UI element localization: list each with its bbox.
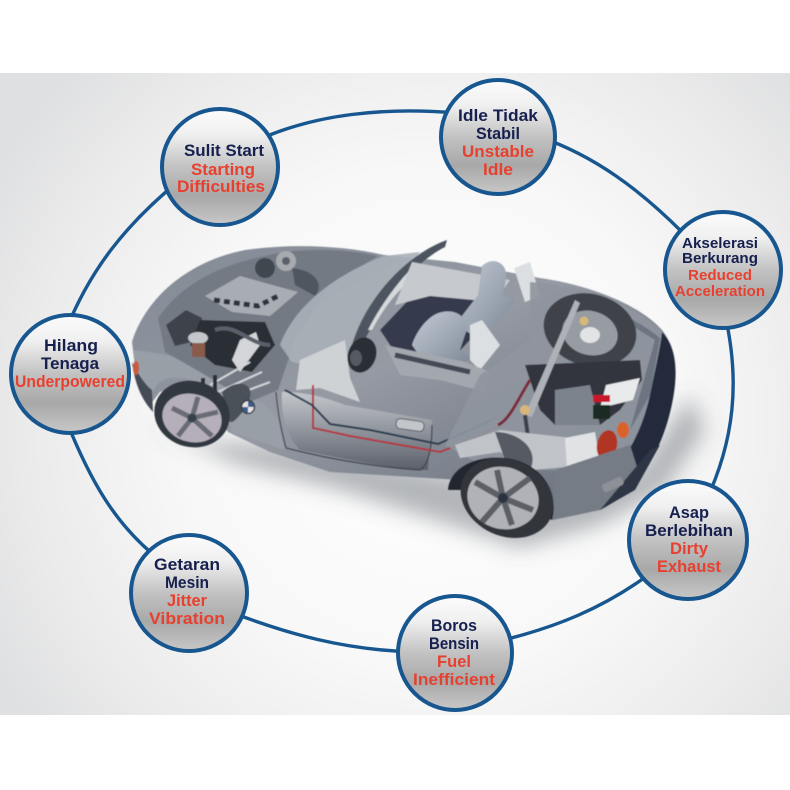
A pillar highlight (368, 268, 418, 330)
suspension struts (525, 300, 580, 417)
rear chassis (455, 430, 590, 470)
near seat (412, 311, 474, 364)
blue wire (285, 390, 495, 444)
engine block (166, 251, 319, 422)
steering wheel (343, 333, 381, 377)
badge: Idle Tidak Stabil: Idle Tidak (458, 106, 539, 125)
badge: Sulit Start: Starting (191, 160, 255, 179)
red wire (313, 385, 500, 452)
badge: Akselerasi Berkurang: Berkurang (682, 250, 758, 267)
rear wheel (447, 443, 567, 553)
red conduit (498, 380, 530, 425)
trunk lid highlight (590, 300, 660, 430)
far door panel (395, 262, 510, 305)
pipes and silver parts (188, 332, 208, 344)
rear deck transparent (445, 282, 668, 470)
spare tyre (535, 283, 645, 377)
windshield glass (280, 252, 420, 372)
windshield frame (352, 240, 447, 345)
badge: Sulit Start: Difficulties (177, 177, 265, 196)
roll hoops (514, 262, 540, 302)
badge: Hilang Tenaga: Tenaga (41, 354, 100, 373)
badge: Akselerasi Berkurang: Akselerasi (682, 235, 758, 252)
badge: Getaran Mesin: Jitter (167, 591, 207, 610)
badge: Getaran Mesin (131, 535, 247, 651)
badge: Hilang Tenaga (11, 315, 129, 433)
badge: Getaran Mesin: Mesin (165, 573, 209, 592)
centre console (385, 345, 490, 392)
front fender highlight (133, 350, 285, 450)
door handle (395, 418, 425, 432)
exhaust (601, 476, 625, 493)
badge: Idle Tidak Stabil: Unstable (462, 142, 534, 161)
turbo top (276, 251, 296, 271)
badge: Akselerasi Berkurang: Acceleration (675, 283, 765, 300)
badge: Idle Tidak Stabil (441, 80, 555, 194)
car body (132, 246, 675, 520)
hood cutaway (158, 250, 378, 402)
tail light (594, 422, 629, 462)
badge: Boros Bensin: Bensin (429, 634, 479, 653)
badge: Hilang Tenaga: Underpowered (15, 372, 125, 391)
battery (593, 378, 640, 419)
rear reflector (571, 477, 583, 489)
badge: Hilang Tenaga: Hilang (44, 336, 98, 355)
cabin floor (380, 290, 490, 372)
badge: Asap Berlebihan: Berlebihan (645, 521, 733, 540)
badge: Akselerasi Berkurang: Reduced (688, 267, 752, 284)
badge: Asap Berlebihan: Asap (669, 503, 709, 522)
hoses under fender (210, 362, 270, 400)
badge: Idle Tidak Stabil: Stabil (476, 124, 520, 143)
BMW badge (242, 400, 254, 414)
badge: Getaran Mesin: Vibration (149, 609, 225, 628)
badge: Idle Tidak Stabil: Idle (483, 160, 513, 179)
front marker light (133, 361, 139, 375)
rear bumper (552, 445, 638, 520)
air filter box (166, 310, 202, 346)
valve cover (205, 276, 298, 316)
door lower outline (276, 392, 432, 470)
engine bay shadows (190, 320, 275, 372)
car illustration (132, 240, 705, 553)
badge: Boros Bensin: Fuel (437, 652, 471, 671)
badge: Getaran Mesin: Getaran (154, 555, 220, 574)
badge: Boros Bensin: Boros (431, 616, 477, 635)
bumper dark edge (132, 362, 153, 412)
front wheel (147, 372, 237, 456)
connecting ring (66, 111, 733, 652)
badge: Asap Berlebihan (629, 481, 747, 599)
badge: Boros Bensin: Inefficient (413, 670, 495, 689)
tail dark edge (590, 332, 676, 510)
badge: Sulit Start: Sulit Start (184, 141, 264, 160)
badge: Boros Bensin (398, 596, 512, 710)
transparent dash parts (296, 340, 360, 402)
trunk bay (525, 360, 642, 425)
door panel (282, 392, 432, 470)
wiring harness (285, 385, 500, 452)
badge: Asap Berlebihan: Dirty (670, 539, 709, 558)
car ground shadow (150, 395, 705, 548)
far seat (455, 261, 515, 338)
badge: Akselerasi Berkurang (665, 212, 781, 328)
badge: Asap Berlebihan: Exhaust (657, 557, 721, 576)
badge: Sulit Start (162, 109, 278, 225)
